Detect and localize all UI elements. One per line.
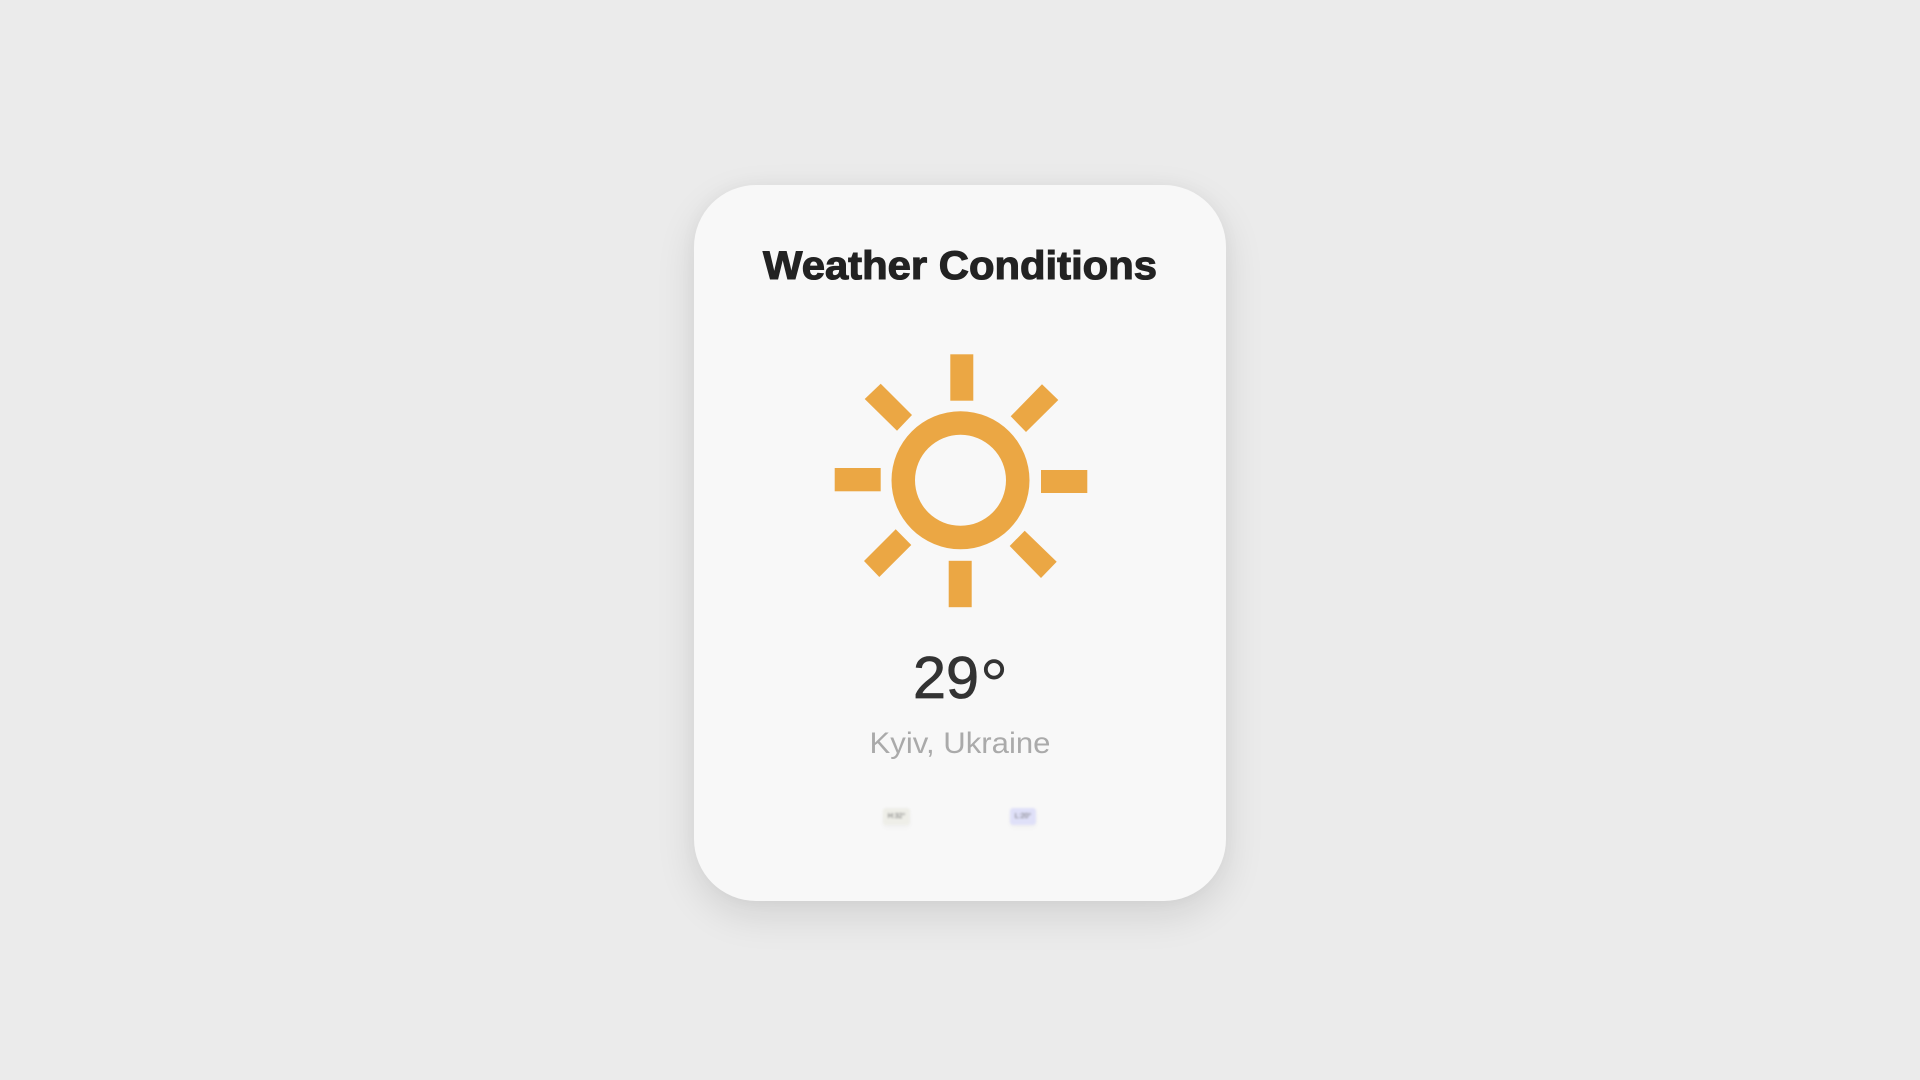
high temperature chip: H:32° <box>888 813 905 820</box>
low temperature chip <box>1010 808 1036 825</box>
icon: sun <box>835 354 1087 607</box>
panel: weather card <box>694 185 1226 901</box>
temperature: 29 <box>913 645 979 711</box>
title: Weather Conditions <box>763 244 1157 288</box>
location: Kyiv, Ukraine <box>870 727 1050 760</box>
low temperature chip: L:20° <box>1015 813 1031 820</box>
degree symbol: ° <box>980 646 1008 726</box>
high temperature chip <box>883 808 910 825</box>
